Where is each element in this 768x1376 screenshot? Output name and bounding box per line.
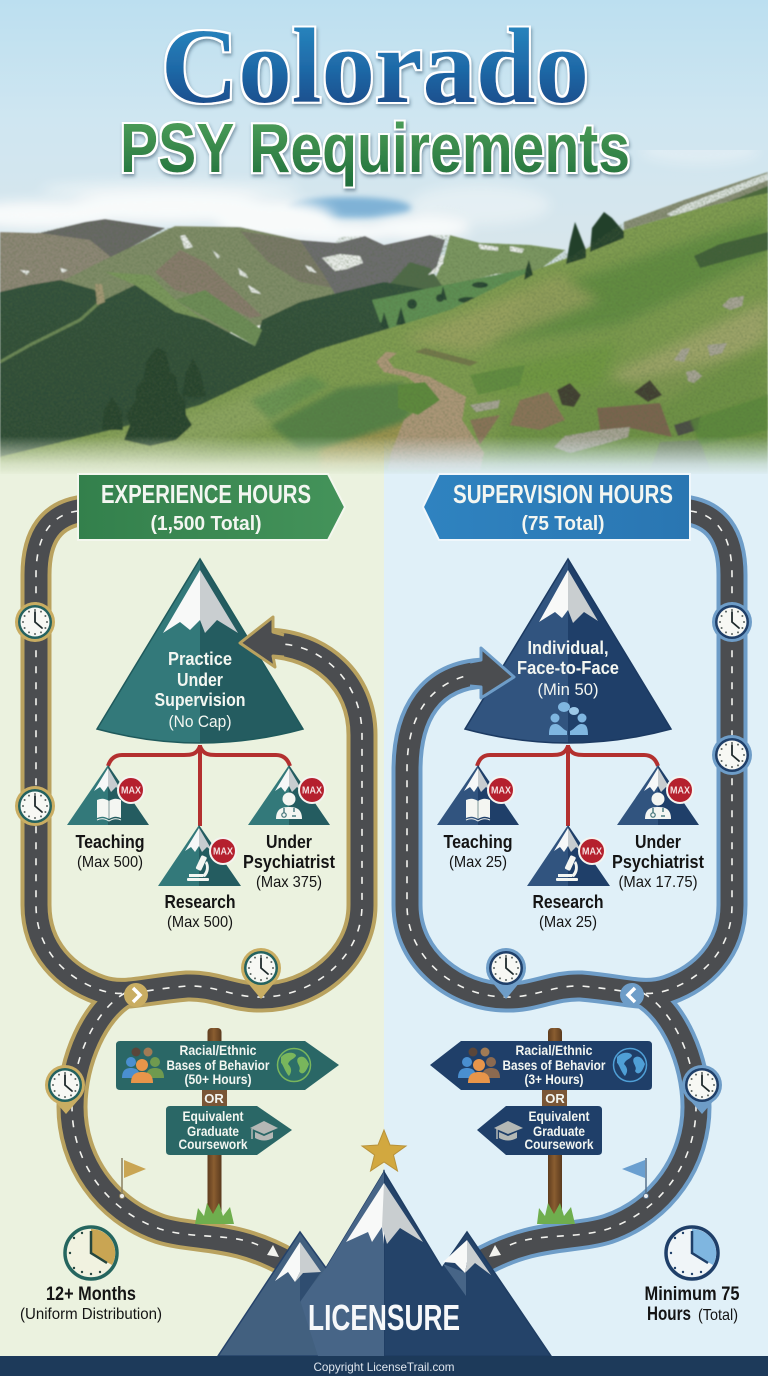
text: minimum 75 hours <box>644 1284 740 1325</box>
label: under psychiatrist: (Max 17.75) <box>618 874 698 891</box>
clock pin on lower road <box>682 1065 722 1114</box>
sign text: Equivalent <box>182 1108 244 1124</box>
clock marker <box>712 735 752 775</box>
clock marker <box>712 602 752 642</box>
clock: 12+ months <box>65 1227 117 1279</box>
clock: minimum 75 hours <box>666 1227 718 1279</box>
banner: supervision hours <box>423 474 690 540</box>
OR label: OR <box>545 1091 565 1106</box>
blue sky gap <box>288 197 412 219</box>
supervision hierarchy <box>437 559 704 931</box>
sign text: Graduate <box>187 1123 239 1139</box>
large mountain: practice under supervision <box>97 559 303 743</box>
grass <box>537 1203 575 1224</box>
label: teaching: Teaching <box>444 832 512 852</box>
banner subheading: (1,500 Total) <box>150 513 262 535</box>
dirt and shrubs <box>470 380 768 470</box>
trail <box>376 352 484 470</box>
landscape photo <box>0 136 768 480</box>
label: teaching: (Max 500) <box>77 854 143 871</box>
sign text: Coursework <box>524 1136 594 1152</box>
banner heading: SUPERVISION HOURS <box>453 479 673 509</box>
label: under psychiatrist: Psychiatrist <box>243 852 335 872</box>
icon: graduation cap <box>494 1121 523 1140</box>
mountain text: Face-to-Face <box>517 658 619 678</box>
junction marker left <box>124 983 148 1007</box>
banner subheading: (75 Total) <box>522 513 604 535</box>
label: research: Research <box>532 892 604 912</box>
sign: equivalent graduate coursework <box>477 1106 602 1155</box>
road end arrow left <box>267 1245 279 1257</box>
experience hierarchy <box>67 559 335 931</box>
sign text: (3+ Hours) <box>524 1071 584 1087</box>
junction marker right <box>620 983 644 1007</box>
sign: equivalent graduate coursework <box>166 1106 292 1155</box>
title <box>120 8 630 187</box>
label: under psychiatrist: Under <box>266 832 312 852</box>
clock pin on lower road <box>45 1065 85 1114</box>
label: research <box>164 892 236 931</box>
clock marker <box>15 602 55 642</box>
connector lines <box>477 745 658 826</box>
grass <box>195 1203 234 1224</box>
large mountain: individual face-to-face <box>465 559 671 743</box>
text: minimum 75 hours: Minimum 75 <box>644 1284 740 1305</box>
text: 12+ months <box>20 1284 162 1323</box>
label: under psychiatrist: Psychiatrist <box>612 852 704 872</box>
clock marker <box>15 786 55 826</box>
icon: graduation cap <box>250 1121 278 1140</box>
mountain text: Supervision <box>154 690 246 710</box>
sign text <box>524 1108 594 1152</box>
mountain text: (Min 50) <box>538 680 598 699</box>
OR label: OR <box>204 1091 224 1106</box>
label: under psychiatrist <box>243 832 335 891</box>
small mountain: research <box>158 825 241 886</box>
icon: people <box>122 1048 164 1083</box>
label: under psychiatrist: Under <box>635 832 681 852</box>
signpost: experience <box>116 1028 339 1224</box>
sign text <box>178 1108 248 1152</box>
sign text: Coursework <box>178 1136 248 1152</box>
sign text: Racial/Ethnic <box>180 1042 257 1058</box>
flag left <box>120 1158 146 1198</box>
road: supervision loop (right) <box>407 510 732 1264</box>
sign text: Graduate <box>533 1123 585 1139</box>
small mountain: under psychiatrist <box>248 765 330 825</box>
licensure mountain <box>218 1172 551 1356</box>
mountain text <box>154 649 246 731</box>
post <box>548 1028 562 1217</box>
road arrow head: into practice under supervision <box>240 617 284 667</box>
text: minimum 75 hours: (Total) <box>698 1307 738 1324</box>
label: research: (Max 500) <box>167 914 233 931</box>
road: experience loop (left) <box>36 510 362 1264</box>
label: under psychiatrist <box>612 832 704 891</box>
icon: globe <box>614 1048 646 1082</box>
small mountain: teaching <box>67 765 149 825</box>
icon: face-to-face conversation <box>549 702 588 735</box>
sign text: (50+ Hours) <box>184 1071 252 1087</box>
text: minimum 75 hours: Hours <box>647 1304 691 1325</box>
footer bar <box>0 1356 768 1376</box>
copyright: Copyright LicenseTrail.com <box>314 1360 454 1374</box>
mountain text: (No Cap) <box>168 712 232 731</box>
label: research <box>532 892 604 931</box>
clock pin on road <box>241 948 281 999</box>
sign text: Bases of Behavior <box>502 1057 606 1073</box>
title line: PSY Requirements: PSY Requirements <box>120 109 630 187</box>
mountain text: Under <box>177 670 223 690</box>
sign text: Bases of Behavior <box>166 1057 270 1073</box>
licensure label: LICENSURE <box>308 1297 460 1338</box>
label: teaching: Teaching <box>76 832 144 852</box>
text: 12+ months: 12+ Months <box>46 1284 136 1305</box>
label: teaching <box>76 832 144 871</box>
icon: people <box>458 1048 500 1083</box>
signpost: supervision <box>430 1028 652 1224</box>
sign text <box>166 1042 270 1087</box>
label: research: Research <box>164 892 236 912</box>
clock pin on road <box>486 948 526 999</box>
small mountain: teaching <box>437 765 519 825</box>
mountain text: Individual, <box>528 638 608 658</box>
mountain text: Practice <box>168 649 232 669</box>
photo fade right <box>384 436 768 476</box>
rocks <box>470 296 744 453</box>
road arrow head: into individual face-to-face <box>470 648 514 698</box>
connector lines <box>108 745 290 826</box>
label: teaching <box>444 832 512 871</box>
banner: experience hours <box>78 474 345 540</box>
post <box>208 1028 222 1217</box>
sign text: Racial/Ethnic <box>516 1042 593 1058</box>
title line: Colorado: Colorado <box>161 8 589 126</box>
flag right <box>622 1158 648 1198</box>
label: under psychiatrist: (Max 375) <box>256 874 322 891</box>
icon: globe <box>278 1048 310 1082</box>
sign text: Equivalent <box>528 1108 590 1124</box>
banner heading: EXPERIENCE HOURS <box>101 479 311 509</box>
label: teaching: (Max 25) <box>449 854 507 871</box>
sign text <box>502 1042 606 1087</box>
small mountain: under psychiatrist <box>617 765 699 825</box>
grassy hillside <box>0 193 768 480</box>
mountain text <box>517 638 619 699</box>
left panel background <box>0 474 384 1356</box>
evergreen trees <box>102 212 768 446</box>
background panel: sky <box>0 0 768 300</box>
icon: star <box>362 1130 406 1171</box>
sign: racial/ethnic bases of behavior <box>116 1041 339 1090</box>
sign: racial/ethnic bases of behavior <box>430 1041 652 1090</box>
photo fade left <box>0 436 384 476</box>
small mountain: research <box>527 825 610 886</box>
label: research: (Max 25) <box>539 914 597 931</box>
text: 12+ months: (Uniform Distribution) <box>20 1306 162 1323</box>
road end arrow right <box>489 1245 501 1257</box>
right panel background <box>384 474 768 1356</box>
